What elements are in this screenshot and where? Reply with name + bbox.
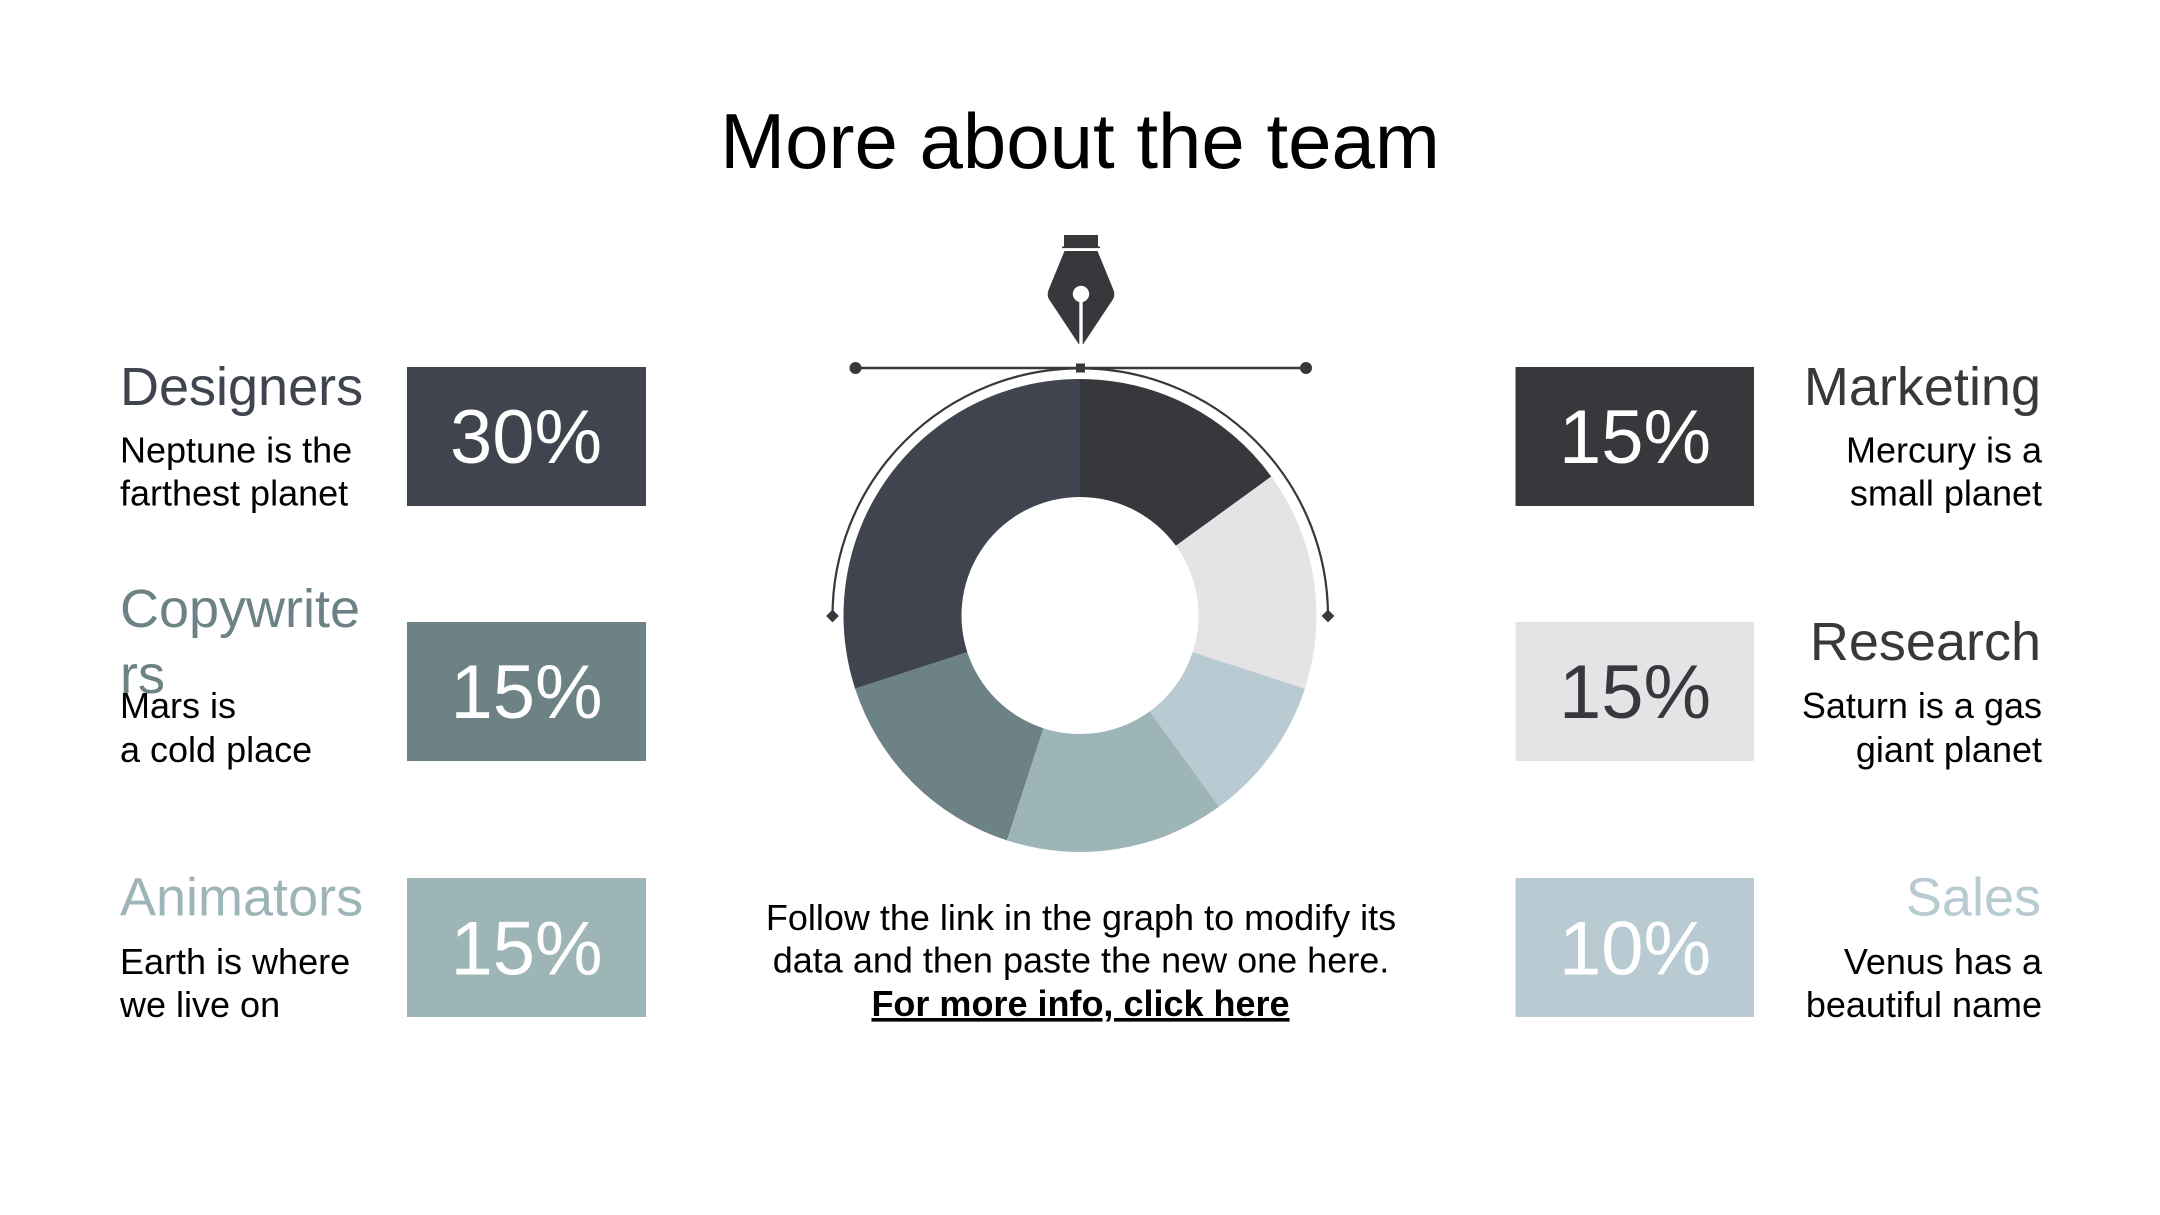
marketing heading: Marketing: [1804, 357, 2041, 417]
segment: designers 30%: [844, 379, 1080, 689]
designers description: Neptune is the: [120, 430, 352, 470]
panel: copywriters: [120, 579, 646, 770]
animators description: we live on: [119, 984, 280, 1025]
marketing percentage: 15%: [1559, 395, 1711, 480]
copywriters description: a cold place: [120, 729, 312, 770]
designers value box: [407, 367, 646, 506]
research percentage: 15%: [1559, 650, 1711, 735]
segment: sales 10%: [1150, 652, 1305, 807]
panel: designers: [120, 357, 646, 514]
animators description: Earth is where: [120, 941, 350, 982]
segment: marketing 15%: [1080, 379, 1271, 546]
icon: pen nib: [1048, 235, 1114, 344]
copywriters heading: Copywrite: [120, 579, 360, 639]
panel: research: [1516, 612, 2042, 770]
copywriters percentage: 15%: [450, 650, 603, 735]
research heading: Research: [1810, 612, 2041, 672]
research value box: [1516, 622, 1754, 761]
copywriters description: Mars is: [120, 685, 236, 726]
chart caption: [766, 897, 1396, 1024]
designers description: farthest planet: [120, 472, 348, 514]
animators percentage: 15%: [450, 906, 603, 992]
designers heading: Designers: [120, 357, 363, 417]
title: More about the team: [720, 97, 1440, 185]
segment: copywriters 15%: [855, 652, 1043, 840]
animators heading: Animators: [120, 868, 363, 928]
animators value box: [407, 878, 646, 1017]
bezier handle arc: [826, 368, 1334, 622]
panel: marketing: [1516, 357, 2043, 514]
designers percentage: 30%: [450, 395, 602, 480]
sales heading: Sales: [1906, 868, 2041, 928]
chart caption: Follow the link in the graph to modify its: [766, 897, 1396, 938]
chart caption: data and then paste the new one here.: [773, 940, 1389, 980]
sales description: beautiful name: [1806, 984, 2042, 1025]
marketing description: Mercury is a: [1846, 430, 2043, 470]
copywriters value box: [407, 622, 646, 761]
research description: Saturn is a gas: [1802, 685, 2042, 726]
sales description: Venus has a: [1844, 941, 2043, 982]
donut chart: [844, 379, 1316, 852]
sales value box: [1516, 878, 1754, 1017]
panel: animators: [119, 868, 646, 1025]
marketing description: small planet: [1850, 472, 2042, 514]
link text: For more info, click here: [871, 983, 1290, 1024]
panel: sales: [1516, 868, 2043, 1025]
marketing value box: [1516, 367, 1754, 506]
segment: animators 15%: [1007, 711, 1219, 852]
segment: research 15%: [1176, 476, 1316, 689]
bezier handle line: [850, 362, 1312, 374]
research description: giant planet: [1856, 729, 2042, 770]
copywriters heading: rs: [120, 645, 165, 705]
sales percentage: 10%: [1559, 906, 1711, 992]
